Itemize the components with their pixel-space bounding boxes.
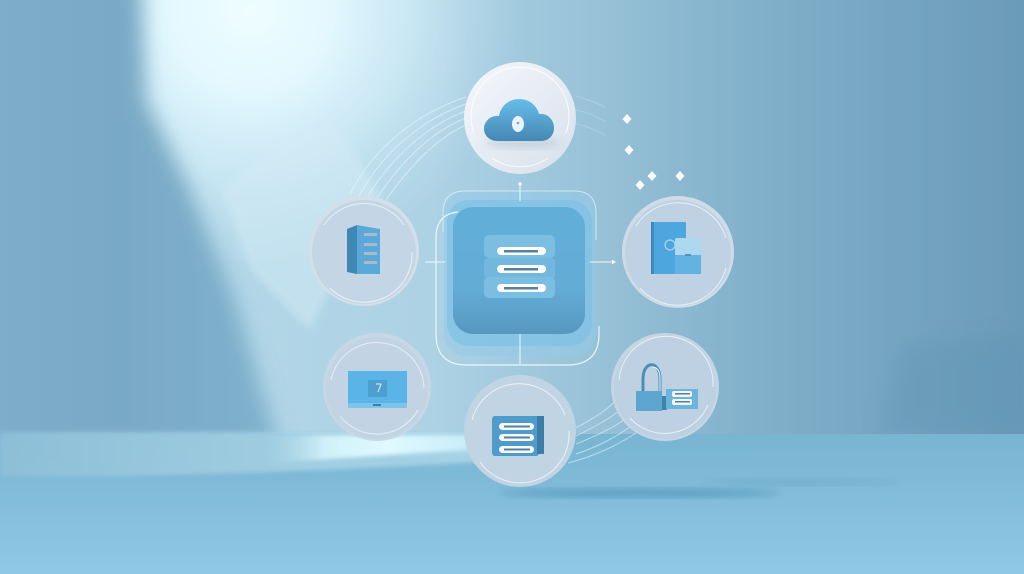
outer glass frame bbox=[436, 191, 599, 365]
node: server stack bbox=[464, 375, 576, 487]
light beam bbox=[0, 0, 520, 330]
icon: server rack bbox=[492, 416, 544, 456]
sparkles bbox=[622, 114, 684, 190]
icon: storage box bbox=[651, 222, 701, 274]
node: monitor bbox=[323, 333, 431, 441]
icon: server tower bbox=[347, 225, 380, 274]
node: server tower bbox=[309, 196, 419, 306]
node: padlock bbox=[611, 333, 719, 441]
connector arcs bbox=[350, 96, 640, 463]
icon: padlock with server bbox=[636, 365, 698, 411]
floor bbox=[0, 430, 1024, 574]
connector lines bbox=[425, 183, 615, 364]
background wall bbox=[0, 0, 1024, 436]
inner tile bbox=[453, 207, 585, 334]
node: cloud bbox=[464, 62, 576, 174]
central server panel bbox=[436, 191, 599, 365]
node: storage box bbox=[622, 196, 734, 308]
icon: cloud with lock bbox=[484, 99, 560, 148]
icon: monitor bbox=[348, 371, 407, 408]
server stack bbox=[484, 235, 555, 298]
left wall shadow bbox=[0, 0, 280, 450]
